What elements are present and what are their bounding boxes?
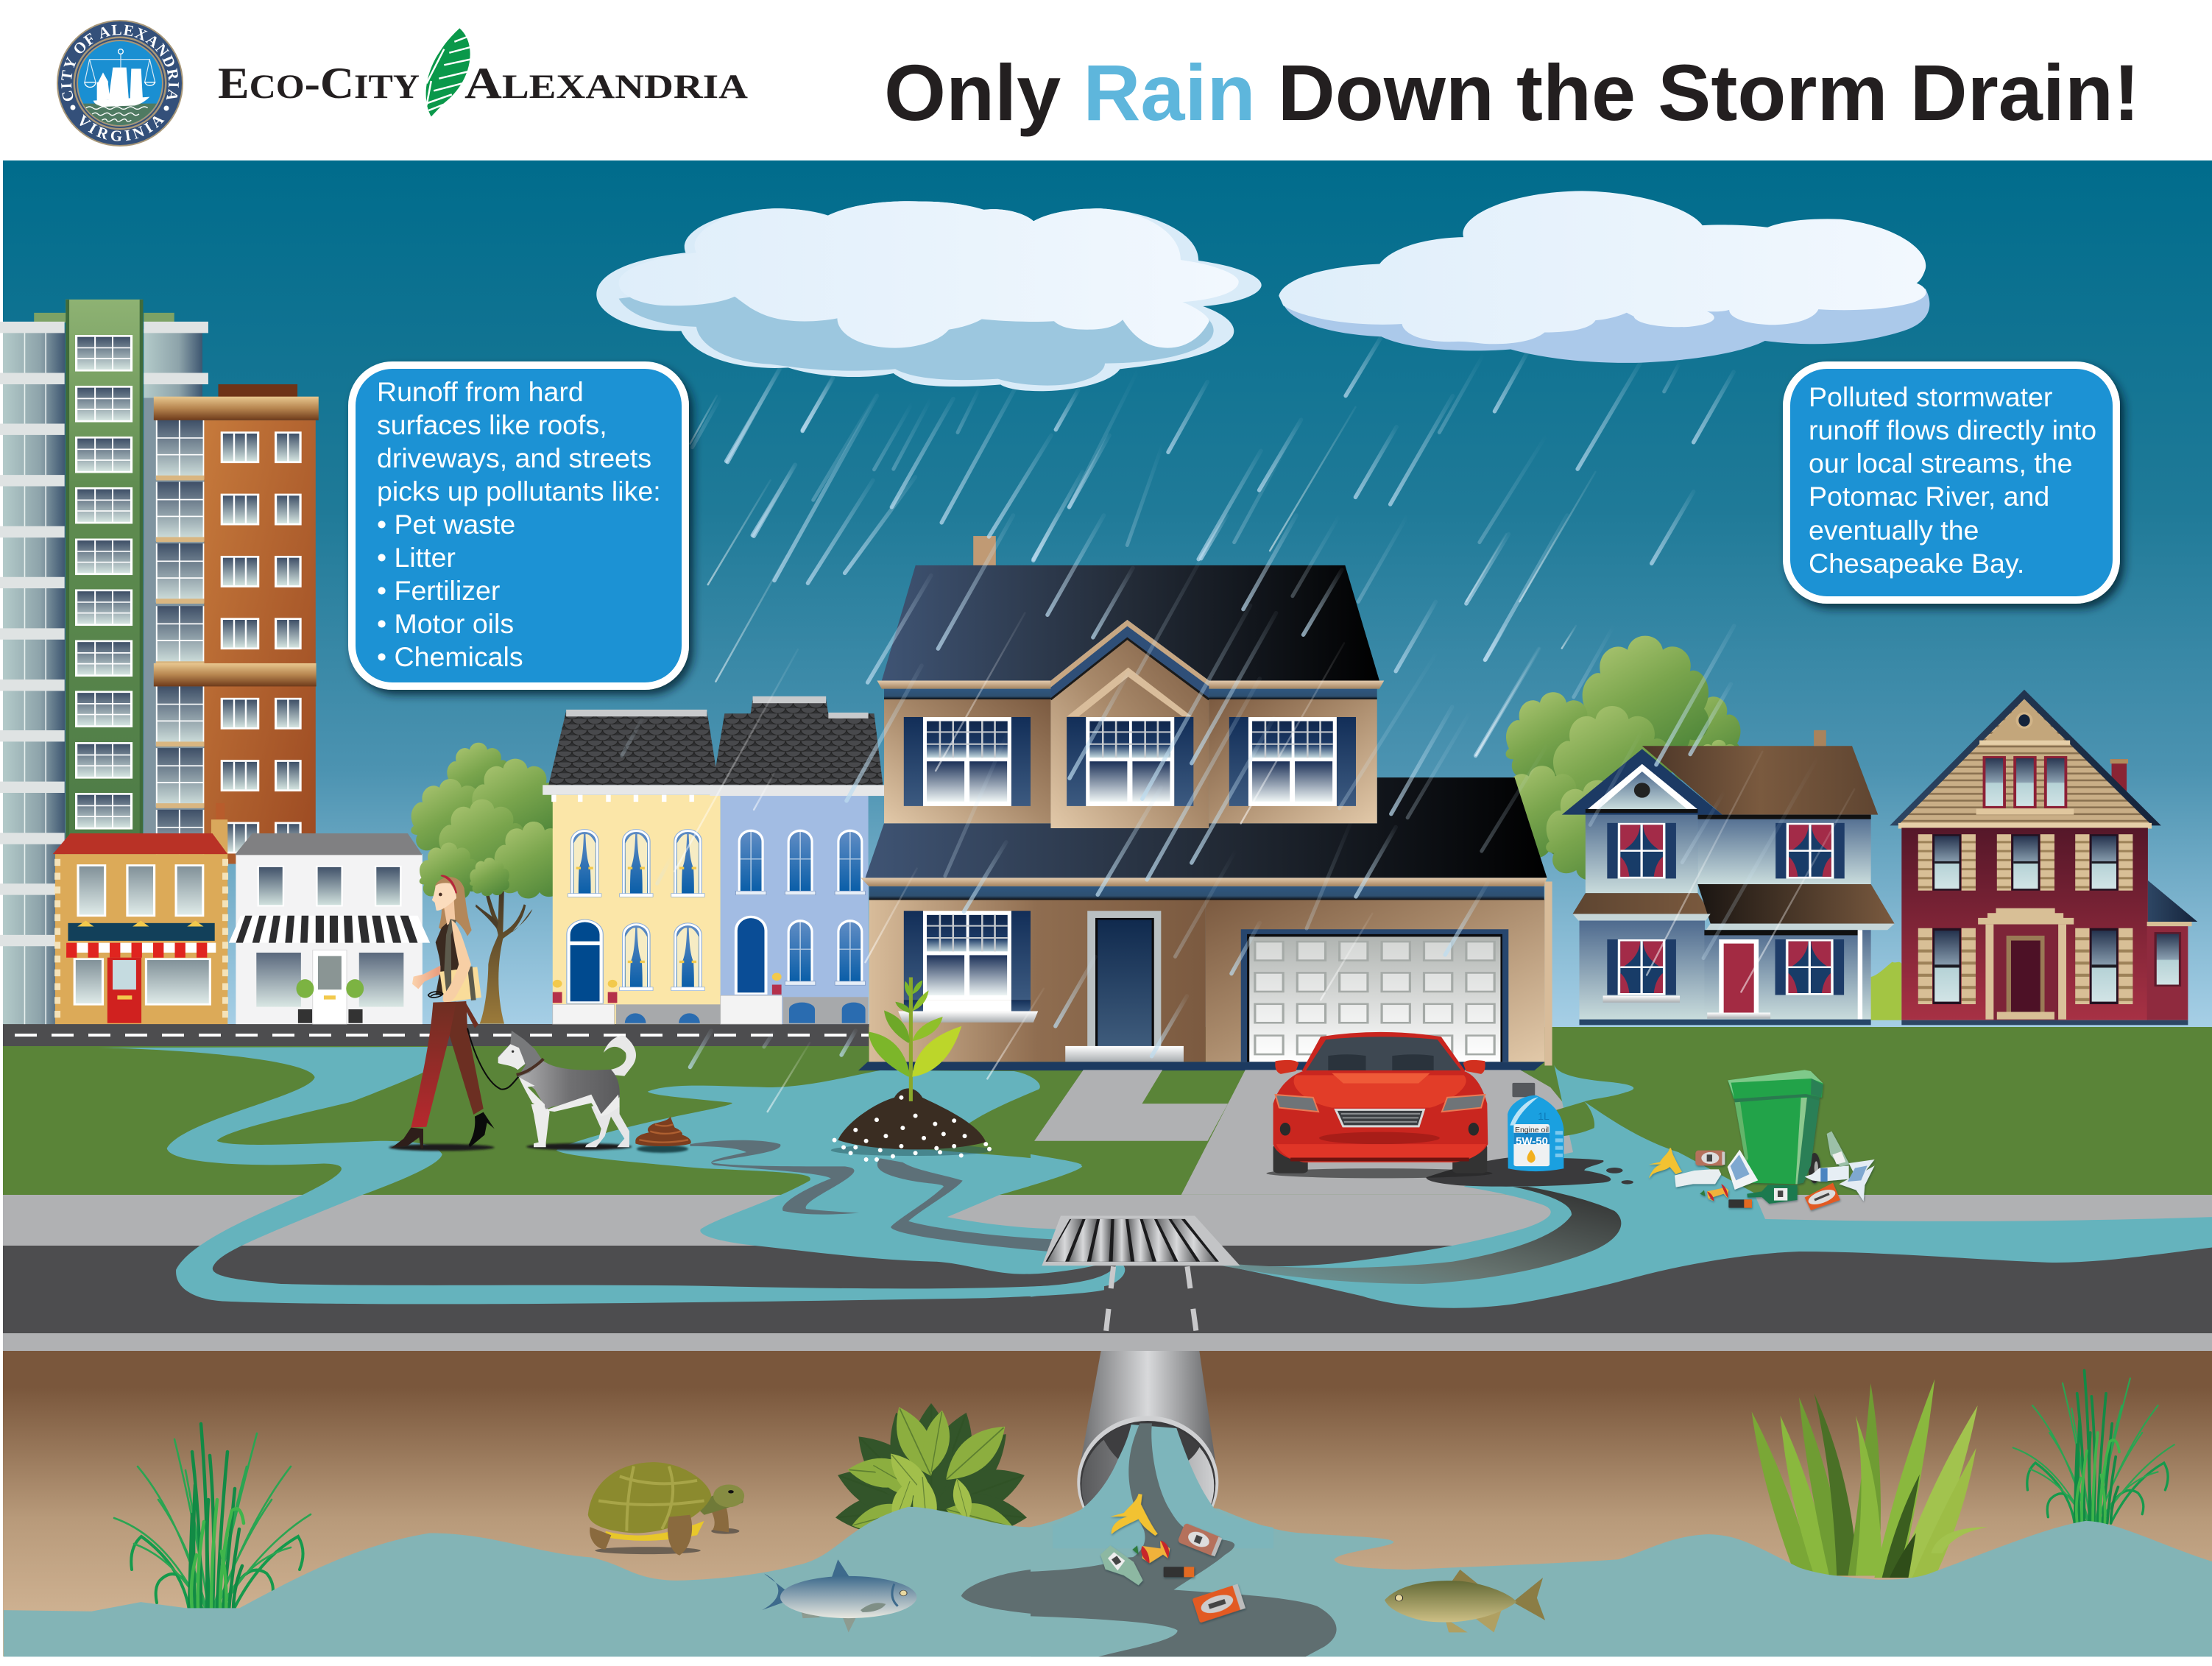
orange can: [1192, 1584, 1245, 1623]
underground plants: [114, 1371, 2174, 1610]
grass left: [114, 1424, 311, 1610]
lower walls: [869, 899, 1206, 1062]
belt strap: [465, 1001, 478, 1028]
green bottle: [1100, 1545, 1143, 1585]
curb: [3, 1333, 2212, 1351]
battery: [1728, 1199, 1752, 1208]
callout: runoff pollutants: [352, 365, 685, 686]
red car: [1266, 1032, 1492, 1178]
underground soil: [3, 1351, 2212, 1656]
banana peel: [1649, 1148, 1682, 1179]
logo wordmark: ECO-CITY: [218, 59, 420, 107]
callout: polluted stormwater: runoff flows directly into: [1809, 414, 2096, 445]
bush: [831, 1400, 1031, 1541]
reeds: [1752, 1379, 1987, 1578]
fertilizer mound with plant: [831, 978, 993, 1160]
red house: [1890, 690, 2197, 1025]
header logos: ALEXANDRIA: [464, 59, 748, 107]
headband: [440, 875, 457, 893]
blue-grey house: [1562, 730, 1901, 1025]
far arm: [412, 966, 440, 989]
pet waste: [635, 1117, 691, 1146]
sidewalk: [3, 1195, 2212, 1246]
apple core: [1700, 1184, 1728, 1201]
oil stream: [1196, 1187, 1621, 1284]
grass right: [2013, 1371, 2174, 1523]
cloud left: [596, 201, 1262, 391]
polluted streams: [690, 1140, 859, 1215]
garage: [1241, 929, 1508, 1062]
stream water underground right: [1031, 1497, 2212, 1656]
crumpled paper: [1839, 1160, 1875, 1201]
upper roof: [882, 565, 1379, 680]
callout: runoff pollutants: picks up pollutants like:: [377, 476, 661, 506]
trash can and litter: [1649, 1070, 1875, 1210]
front leg: [411, 1002, 456, 1128]
city seal: [57, 20, 183, 147]
stream water underground left: [4, 1497, 1104, 1656]
torso: [436, 920, 462, 995]
clear bottle: [1805, 1165, 1849, 1182]
newspaper: [1728, 1150, 1758, 1190]
main house: [858, 536, 1552, 1070]
neck and face: [444, 900, 455, 925]
callout: polluted stormwater: eventually the: [1809, 515, 1979, 546]
orange can: [1805, 1183, 1840, 1210]
left city buildings: [0, 300, 430, 1024]
callout: runoff pollutants: • Pet waste: [377, 509, 515, 540]
callout: polluted stormwater: Potomac River, and: [1809, 481, 2049, 512]
tin can: [1177, 1522, 1223, 1557]
green bottle: [1747, 1185, 1798, 1204]
litter in outfall: [1100, 1494, 1245, 1623]
near arm: [443, 920, 471, 1003]
crushed bottle: [1675, 1169, 1721, 1187]
outfall pipe: [1053, 1351, 1273, 1579]
fish left: [762, 1559, 916, 1632]
apple core: [1132, 1541, 1170, 1563]
woman walking dog: [389, 875, 691, 1153]
lawn: [3, 1027, 2212, 1195]
tortoise: [588, 1462, 744, 1556]
orange tower: [154, 384, 319, 870]
back leg: [444, 1001, 484, 1115]
header logos: [57, 20, 748, 147]
callout: polluted stormwater: Chesapeake Bay.: [1809, 548, 2024, 579]
callout: runoff pollutants: • Fertilizer: [377, 575, 500, 606]
city seal: VIRGINIA: [79, 114, 165, 141]
chimney: [973, 536, 996, 566]
city seal: CITY OF ALEXANDRIA: [61, 25, 179, 102]
battery: [1164, 1567, 1194, 1577]
glass bottle: [1827, 1132, 1850, 1167]
callout: runoff pollutants: driveways, and streets: [377, 442, 651, 473]
callout: runoff pollutants: • Litter: [377, 542, 456, 573]
runoff water left: [99, 1047, 1104, 1304]
oil puddle: [1426, 1157, 1611, 1187]
runoff water right: [1031, 1065, 2212, 1308]
house foundation: [858, 1062, 1544, 1070]
upper walls: [884, 699, 1050, 823]
trash can: [1728, 1070, 1823, 1184]
blue townhouse: [710, 696, 884, 1024]
lower window: [904, 911, 1031, 1000]
lower roof: [866, 777, 1547, 878]
callout: runoff pollutants: surfaces like roofs,: [377, 409, 607, 440]
motor oil bottle: 1L: [1538, 1110, 1550, 1122]
callout: polluted stormwater: Polluted stormwater: [1809, 381, 2052, 412]
road: [3, 1246, 2212, 1333]
fish right: [1385, 1570, 1545, 1632]
shop two: [229, 833, 430, 1024]
rain: [622, 336, 1854, 1112]
cloud right: [1279, 191, 1929, 363]
callout: polluted stormwater: our local streams, the: [1809, 448, 2072, 479]
motor oil bottle: 5W-50: [1516, 1135, 1548, 1148]
driveway and walkway: [1034, 1070, 1671, 1195]
sky: [3, 160, 2212, 1031]
bush: [1871, 962, 1901, 1020]
leash loop: [428, 992, 443, 998]
townhouses: [543, 696, 884, 1024]
dog: [498, 1031, 636, 1147]
callout: polluted stormwater: [1787, 365, 2116, 600]
left tree: [411, 743, 573, 1024]
shadows: [389, 1143, 688, 1153]
motor oil bottle: Engine oil: [1515, 1126, 1549, 1134]
banana peel: [1110, 1494, 1158, 1536]
leaf logo: [426, 28, 473, 116]
callout: runoff pollutants: Runoff from hard: [377, 376, 584, 407]
lawn patch by downspout: [1550, 1101, 1594, 1137]
yellow townhouse: [543, 710, 721, 1024]
front door: [1087, 911, 1161, 1047]
callout: runoff pollutants: • Chemicals: [377, 641, 523, 672]
callout: runoff pollutants: • Motor oils: [377, 608, 514, 639]
shop one: [53, 803, 227, 1024]
tree behind right houses: [1495, 636, 1745, 880]
tin can: [1695, 1151, 1725, 1165]
upper street: [3, 1024, 879, 1047]
runoff water centre: [556, 1070, 1104, 1274]
title: Only Rain Down the Storm Drain!: [884, 48, 2140, 137]
leash: [467, 1028, 519, 1090]
storm drain grate: [1042, 1216, 1240, 1333]
upper windows: [904, 717, 1031, 806]
outfall water: [1053, 1425, 1273, 1548]
shoes: [392, 1128, 423, 1148]
green tower: [0, 300, 208, 1024]
motor oil bottle: [1508, 1083, 1563, 1171]
bag straps and bag: [439, 967, 481, 1003]
hair: [435, 877, 472, 936]
